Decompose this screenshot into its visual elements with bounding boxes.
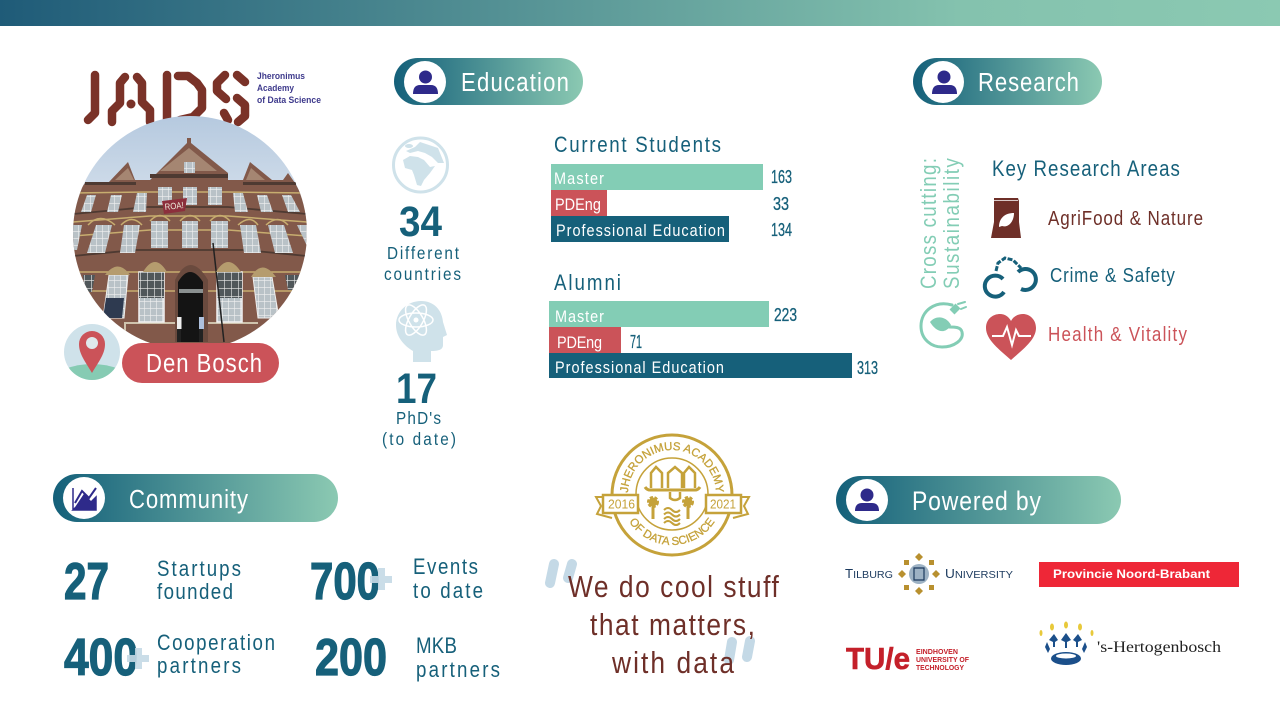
stat: startups [64, 553, 241, 611]
top gradient bar [0, 0, 1280, 26]
photo: university building [70, 115, 310, 355]
stat: events [310, 553, 483, 611]
logo subtitle: Jheronimus [257, 71, 305, 81]
stat: MKB partners: MKB [416, 635, 457, 658]
quote text [568, 570, 780, 681]
research area: crime [985, 258, 1176, 297]
heading: Community: Community [129, 485, 248, 514]
stat: 34 different countries: countries [384, 264, 461, 284]
emblem ribbon right: 2021 [710, 498, 736, 512]
stat: 17 PhDs: (to date) [382, 429, 456, 449]
bar: master: Master [555, 308, 604, 326]
stat: events: 700 [310, 553, 380, 611]
research area: agrifood: AgriFood & Nature [1048, 207, 1203, 229]
JADS wordmark [88, 75, 245, 122]
door [175, 265, 208, 342]
bar: PDEng [551, 190, 789, 216]
quote text: We do cool stuff [568, 570, 780, 605]
bar: professional education: 313 [857, 358, 878, 378]
emblem ribbon left [596, 495, 638, 518]
bar: professional education [549, 353, 878, 378]
stat: MKB partners: partners [416, 659, 500, 682]
quote marks [550, 564, 750, 660]
location pill [122, 343, 279, 383]
icon: head with atom [396, 301, 447, 362]
logo: TU/e [846, 641, 970, 676]
stat: MKB partners: 200 [315, 629, 387, 687]
chart: alumni [549, 272, 878, 378]
bar: professional education: Professional Education [555, 359, 724, 377]
JADS logo [88, 71, 321, 122]
stat: MKB partners [315, 629, 500, 687]
heading: Powered by [836, 476, 1121, 524]
emblem ring text: JHERONIMUS ACADEMY [620, 442, 724, 493]
bar: master: 163 [771, 167, 792, 187]
stat: events: Events [413, 556, 478, 579]
icon: green plug [921, 302, 966, 347]
bar: professional education: 134 [771, 220, 792, 240]
icon: location pin [64, 324, 120, 380]
bar: professional education [551, 216, 792, 242]
banner: ROA! [164, 200, 184, 212]
stat: cooperation partners: partners [157, 655, 241, 678]
logo: TU/e: TECHNOLOGY [916, 665, 964, 672]
bar: PDEng: 71 [630, 332, 642, 352]
bar: professional education: Professional Education [556, 222, 725, 240]
bar: master [549, 301, 797, 327]
logo: TU/e: TU/e [846, 641, 910, 676]
bar: PDEng: 33 [773, 194, 789, 214]
logo: TU/e: UNIVERSITY OF [916, 657, 970, 664]
research area: crime: Crime & Safety [1050, 264, 1176, 286]
stat: 17 PhDs: PhD's [396, 408, 441, 428]
quote text: that matters, [590, 608, 755, 643]
stat: 17 PhDs [382, 365, 456, 449]
heading: Education: Education [461, 68, 569, 97]
bar: master: 223 [774, 305, 797, 325]
icon: globe [394, 138, 448, 192]
heading: Research [913, 58, 1102, 105]
stat: cooperation partners: 400 [64, 629, 138, 687]
emblem ring text: OF DATA SCIENCE [630, 517, 715, 546]
stat: cooperation partners [64, 629, 275, 687]
research area: health: Health & Vitality [1048, 323, 1188, 345]
logo: Tilburg University: TILBURG [845, 566, 893, 581]
arches [105, 262, 276, 277]
logo subtitle: of Data Science [257, 95, 321, 105]
bar: master [551, 164, 792, 190]
heading: Education [394, 58, 583, 105]
stat: 34 different countries [384, 198, 461, 284]
emblem ribbon left: 2016 [608, 498, 635, 512]
logo: 's-Hertogenbosch: 's-Hertogenbosch [1097, 639, 1221, 656]
banner [162, 198, 187, 214]
location pill: Den Bosch [146, 349, 262, 378]
quote [550, 564, 780, 681]
bar: master: Master [554, 170, 604, 188]
emblem ribbon right [706, 495, 749, 518]
stat: startups: founded [157, 581, 233, 604]
anniversary emblem [594, 434, 751, 556]
chart title: Current Students [554, 134, 721, 157]
vertical label: cross cutting sustainability: Cross cutting: [918, 158, 941, 289]
logo: TU/e: EINDHOVEN [916, 649, 958, 656]
stat: 17 PhDs: 17 [396, 365, 437, 413]
logo: Tilburg University: UNIVERSITY [945, 566, 1013, 581]
key research areas title: Key Research Areas [992, 158, 1180, 181]
heading: Research: Research [978, 68, 1079, 97]
bar: PDEng [549, 327, 642, 353]
chart: current students [551, 134, 792, 242]
bar: PDEng: PDEng [555, 196, 601, 214]
stat: cooperation partners: Cooperation [157, 632, 275, 655]
research area: agrifood [991, 198, 1203, 238]
vertical label: cross cutting sustainability: Sustainability [941, 157, 964, 289]
stat: 34 different countries: Different [387, 243, 459, 263]
research area: health [986, 314, 1188, 360]
logo: 's-Hertogenbosch [1040, 622, 1221, 665]
quote text: with data [611, 646, 734, 681]
emblem towers [645, 467, 700, 525]
logo dot [126, 100, 136, 108]
logo: Provincie Noord-Brabant [1039, 562, 1239, 587]
chart title: Alumni [554, 272, 621, 295]
stat: startups: Startups [157, 558, 241, 581]
stat: startups: 27 [64, 553, 109, 611]
vertical label: cross cutting sustainability [918, 157, 964, 289]
logo: Tilburg University [845, 553, 1013, 595]
bar: PDEng: PDEng [557, 334, 602, 352]
stat: 34 different countries: 34 [399, 198, 442, 246]
heading: Community [53, 474, 338, 522]
logo subtitle [257, 71, 321, 105]
windows [73, 162, 307, 322]
logo subtitle: Academy [257, 83, 294, 93]
emblem ring text [620, 442, 724, 546]
heading: Powered by: Powered by [912, 486, 1041, 516]
logo: Provincie Noord-Brabant: Provincie Noord-Brabant [1053, 567, 1210, 581]
stat: events: to date [413, 580, 483, 603]
